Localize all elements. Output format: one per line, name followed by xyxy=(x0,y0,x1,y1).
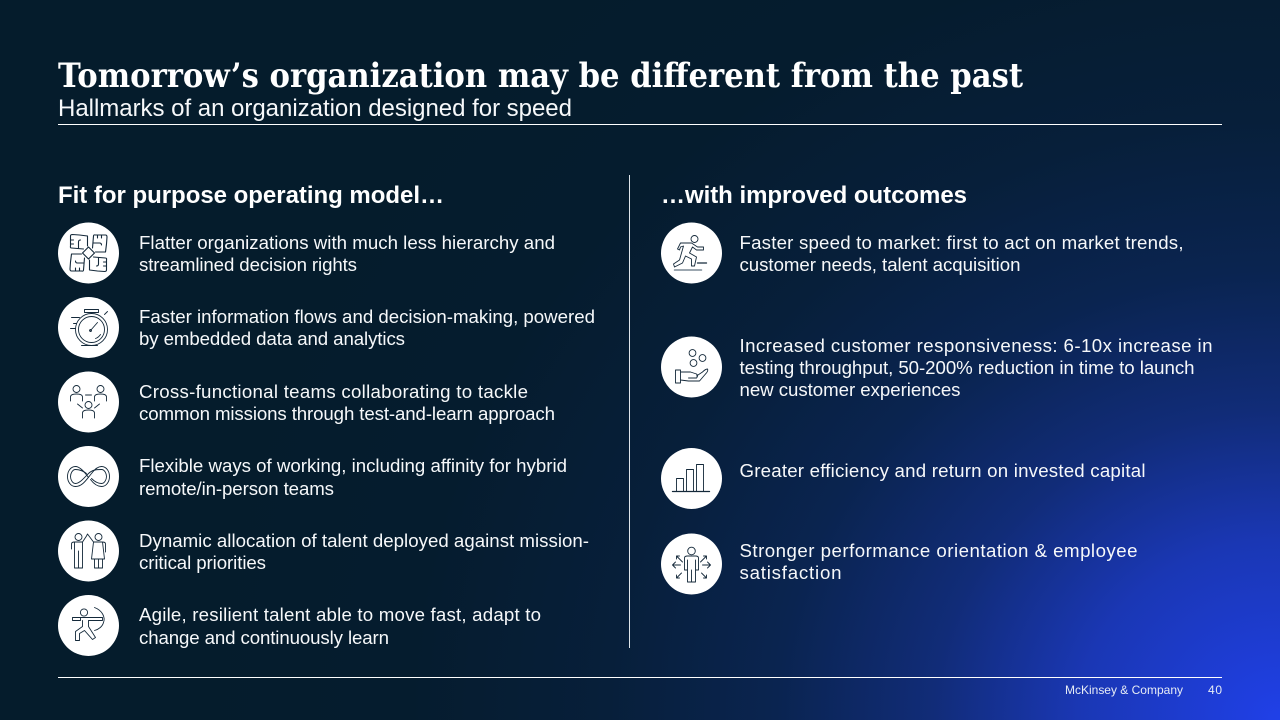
item: cross-functional teams xyxy=(58,372,555,432)
text: cross-functional teams xyxy=(139,381,555,424)
panel: outcomes xyxy=(661,182,1212,594)
text: performance orientation: Stronger performance orientation & employee xyxy=(740,540,1138,561)
icon: hand with circles xyxy=(661,336,722,398)
item: agile resilient talent xyxy=(58,595,541,656)
text: flatter organizations: streamlined decision rights xyxy=(139,254,357,275)
icon: bar chart xyxy=(661,448,722,509)
text: greater efficiency: Greater efficiency and return on invested capital xyxy=(740,460,1146,481)
footer: page number: 40 xyxy=(1208,683,1222,697)
icon: person with arrows xyxy=(661,534,722,594)
text: customer responsiveness: testing throughput, 50-200% reduction in time to launch xyxy=(740,357,1194,378)
text: customer responsiveness: new customer experiences xyxy=(740,379,960,400)
item: dynamic allocation xyxy=(58,520,589,582)
text: dynamic allocation: Dynamic allocation of talent deployed against mission- xyxy=(139,530,589,551)
panel: operating model xyxy=(58,182,595,656)
heading: operating model: Fit for purpose operating model… xyxy=(58,182,444,209)
text: flexible ways of working xyxy=(139,455,567,499)
text: faster information xyxy=(139,306,595,349)
text: agile resilient talent xyxy=(139,604,541,648)
text: faster speed to market: customer needs, talent acquisition xyxy=(740,254,1020,275)
text: flatter organizations: Flatter organizations with much less hierarchy and xyxy=(139,232,555,253)
icon: joined hands xyxy=(58,222,119,284)
footer: source: McKinsey & Company xyxy=(1065,683,1183,697)
text: customer responsiveness xyxy=(740,335,1212,400)
subtitle: Hallmarks of an organization designed for speed xyxy=(58,95,572,122)
text: cross-functional teams: Cross-functional teams collaborating to tackle xyxy=(139,381,528,402)
item: flexible ways of working xyxy=(58,446,567,507)
icon: two people high five xyxy=(58,520,119,582)
text: faster information: by embedded data and analytics xyxy=(139,328,405,349)
text: performance orientation xyxy=(740,540,1138,583)
text: flatter organizations xyxy=(139,232,555,275)
text: faster speed to market: Faster speed to market: first to act on market trends, xyxy=(740,232,1184,253)
item: greater efficiency xyxy=(661,448,1146,509)
title: Tomorrow’s organization may be different from the past xyxy=(58,56,1023,96)
item: faster information xyxy=(58,297,595,358)
text: faster speed to market xyxy=(740,232,1184,275)
text: customer responsiveness: Increased customer responsiveness: 6-10x increase in xyxy=(740,335,1212,356)
icon: archer xyxy=(58,595,119,656)
text: dynamic allocation: critical priorities xyxy=(139,552,266,573)
item: faster speed to market xyxy=(661,222,1184,284)
text: cross-functional teams: common missions through test-and-learn approach xyxy=(139,403,555,424)
item: customer responsiveness xyxy=(661,335,1212,400)
text: dynamic allocation xyxy=(139,530,589,573)
icon: infinity loop xyxy=(58,446,119,507)
icon: team xyxy=(58,372,119,432)
item: flatter organizations xyxy=(58,222,555,284)
text: agile resilient talent: Agile, resilient talent able to move fast, adapt to xyxy=(139,604,541,625)
icon: stopwatch xyxy=(58,297,119,358)
text: faster information: Faster information flows and decision-making, powered xyxy=(139,306,595,327)
icon: runner xyxy=(661,222,722,284)
text: flexible ways of working: Flexible ways of working, including affinity for hybrid xyxy=(139,455,567,476)
text: agile resilient talent: change and continuously learn xyxy=(139,627,389,648)
heading: outcomes: …with improved outcomes xyxy=(661,182,967,209)
item: performance orientation xyxy=(661,534,1138,594)
text: flexible ways of working: remote/in-person teams xyxy=(139,478,334,499)
text: performance orientation: satisfaction xyxy=(740,562,842,583)
